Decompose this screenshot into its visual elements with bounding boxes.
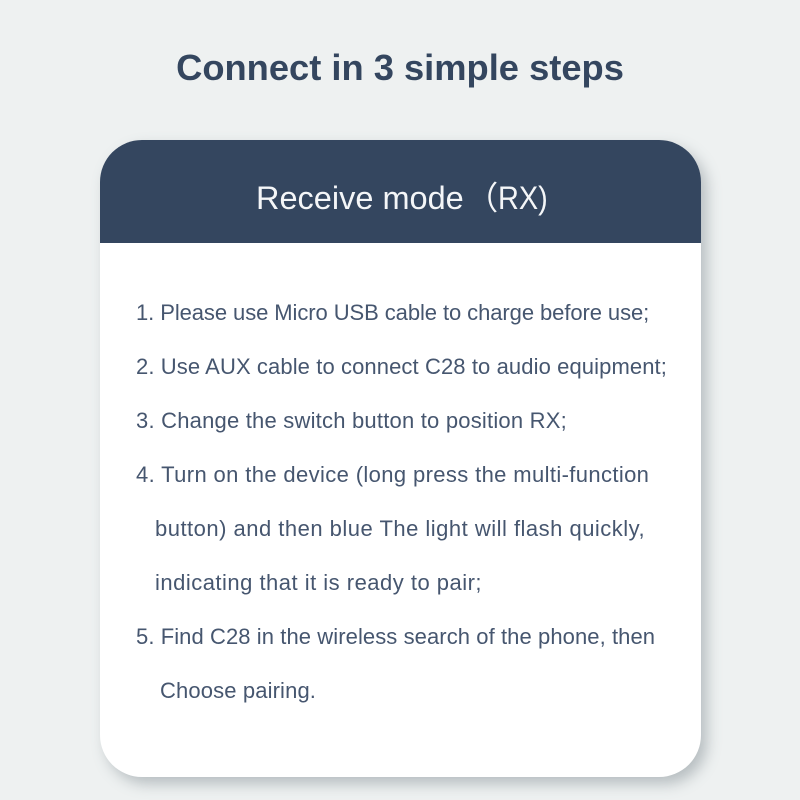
- panel header: RX): [498, 180, 548, 216]
- step 1 text: 1. Please use Micro USB cable to charge before use;: [136, 300, 649, 325]
- panel header: [100, 140, 701, 243]
- panel: receive mode card: [100, 140, 701, 777]
- step 3 text: 3. Change the switch button to position RX;: [136, 408, 567, 433]
- step 5 text line 1: 5. Find C28 in the wireless search of the phone, then: [136, 624, 655, 649]
- step 2 text: 2. Use AUX cable to connect C28 to audio equipment;: [136, 354, 667, 379]
- step 4 text line 1: 4. Turn on the device (long press the multi-function: [136, 462, 649, 487]
- step 5 text line 2: Choose pairing.: [160, 678, 316, 703]
- title: Connect in 3 simple steps: [176, 47, 624, 88]
- panel header: Receive mode（: [256, 180, 498, 216]
- step 4 text line 2: button) and then blue The light will flash quickly,: [155, 516, 645, 541]
- step 4 text line 3: indicating that it is ready to pair;: [155, 570, 482, 595]
